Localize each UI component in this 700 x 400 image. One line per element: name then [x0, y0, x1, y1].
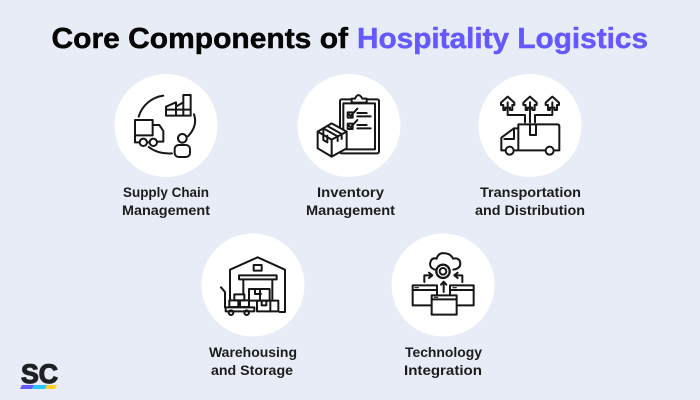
- label: [209, 344, 297, 378]
- title: Hospitality Logistics: [357, 23, 648, 55]
- label: Management: [122, 202, 210, 218]
- title: Core Components of: [52, 23, 348, 55]
- icon circle: [202, 234, 304, 336]
- icon: cloud, gear and browser windows: [413, 253, 474, 315]
- icon: clipboard and box: [318, 95, 379, 157]
- icon circle: [114, 74, 218, 177]
- icon circle: [392, 234, 494, 336]
- logo: SC: SC: [21, 359, 58, 389]
- label: Transportation: [480, 184, 581, 200]
- label: Technology: [405, 344, 482, 360]
- label: Management: [306, 202, 395, 218]
- panel: warehousing and storage: [202, 234, 304, 378]
- title: [52, 23, 648, 55]
- label: Warehousing: [209, 344, 297, 360]
- label: [475, 184, 585, 218]
- label: [404, 344, 482, 378]
- panel: transportation and distribution: [475, 74, 585, 218]
- panel: inventory management: [298, 74, 400, 218]
- icon: warehouse with trolley: [221, 257, 285, 315]
- label: Supply Chain: [123, 184, 209, 200]
- icon circle: [298, 74, 400, 177]
- icon: truck, factory and person cycle: [135, 95, 195, 157]
- label: and Distribution: [475, 202, 585, 218]
- label: [122, 184, 210, 218]
- label: and Storage: [211, 362, 293, 378]
- panel: technology integration: [392, 234, 494, 378]
- icon: delivery truck with three houses: [501, 97, 559, 155]
- label: [306, 184, 395, 218]
- panel: supply chain management: [114, 74, 218, 218]
- icon circle: [478, 74, 582, 177]
- label: Inventory: [317, 184, 384, 200]
- label: Integration: [404, 362, 482, 378]
